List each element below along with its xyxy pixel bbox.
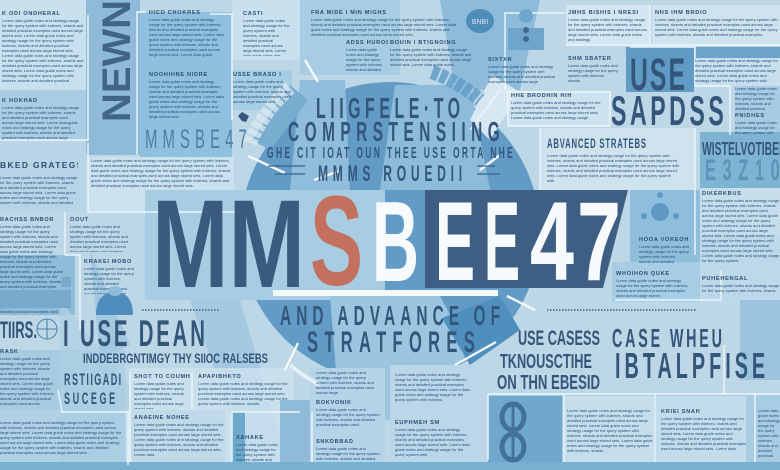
block: right paragraph two: Lorem data guide notes and strategy usage for the query system with indexes, shards and detailed practical. bbox=[735, 86, 777, 111]
subtitle stack: GHE CIT IOAT OUN THEE USE ORTA NHE bbox=[267, 144, 513, 162]
subheading: INDDEBRGNTIMGY THY SIIOC RALSEBS bbox=[83, 351, 268, 366]
block: whoihon: WHOIHON QUKE bbox=[616, 271, 670, 277]
block: oout: OOUT bbox=[70, 217, 89, 223]
faded repeat label: MMSBE47 bbox=[145, 123, 247, 154]
icon: pin bbox=[238, 112, 249, 122]
block: grated strategy bbox=[0, 160, 78, 207]
text blocks: top centre and right bbox=[311, 10, 779, 298]
block: top panel one: JMHS BISHIS I NRESI bbox=[568, 10, 639, 16]
heading rstiigadi success: SUCEGE bbox=[64, 389, 115, 408]
block: adss hurioso bbox=[346, 40, 388, 71]
text blocks: bottom row bbox=[0, 349, 780, 464]
block: noohihne nidre: NOOHIHNE NIDRE bbox=[149, 72, 208, 78]
block: secondary notes: K HOKHAD bbox=[2, 98, 38, 104]
block: column two: KRIEI SNAH bbox=[661, 409, 700, 415]
badge bbox=[466, 9, 494, 33]
block: hhe brodhin: Lorem data guide notes and strategy usage for the query system with indexes, shards and detailed practical examples used across large stored sets. Lorem data guide notes and strategy usage. bbox=[511, 100, 601, 120]
subtitle stack bbox=[267, 92, 513, 186]
block: sixtxr: SIXTXR bbox=[488, 57, 512, 63]
block: centre paragraph: Lorem data guide notes and strategy usage for the query system with indexes, shards and detailed practical examples used across large. bbox=[316, 370, 374, 395]
block: top panel two: Lorem data guide notes and strategy usage for the query system with indexes, shards and detailed practical examples used across large stored sets. Lorem data guide notes and strategy usage for the query system with indexes, shards and detailed practical examples. bbox=[655, 17, 778, 37]
main title MMSBEE47: S bbox=[310, 170, 363, 313]
headline USE SAPDSS: SAPDSS bbox=[611, 88, 724, 135]
main title MMSBEE47: 7 bbox=[577, 179, 621, 304]
block: usse braso: USSE BRASO I bbox=[233, 72, 282, 78]
heading rstiigadi success bbox=[64, 370, 121, 408]
icon: user bbox=[96, 286, 133, 315]
block: euphmeh: EUPHMEH SM bbox=[395, 420, 440, 426]
block: shm sbater: Lorem data guide notes and strategy usage for the query system with indexes, shards. bbox=[568, 63, 618, 83]
main title MMSBEE47: E bbox=[435, 179, 475, 304]
tagline: AND ADVAANCE OF bbox=[280, 300, 500, 331]
block: anaeine nohee: Lorem data guide notes and strategy usage for the query system with indexes, shards and detailed practical examples used across large stored sets. Lorem data guide notes and strategy usage for the query system with indexes, shards and detailed practical examples used across large stored sets. Lorem data. bbox=[134, 422, 224, 457]
block: pnidhes bbox=[735, 113, 777, 134]
block: loss paragraph: Lorem data guide notes and strategy usage for the query system with indexes, shards and detailed practical examples used across large stored sets. Lorem data guide notes and strategy usage for the query system with indexes. bbox=[395, 372, 470, 402]
block: iiico chokres: Lorem data guide notes and strategy usage for the query system with indexes, shards and detailed practical examples used across large stored sets. Lorem data guide notes and strategy usage for the query system with indexes, shards and detailed practical examples used across large stored sets. Lorem data guide. bbox=[149, 17, 224, 57]
headline USE SAPDSS: USE bbox=[630, 49, 685, 100]
subtitle stack: LIIGFELE·TO bbox=[316, 92, 460, 124]
block: hooa vokeohn: Lorem data guide notes and strategy usage for the query system with indexes, shards and detailed. bbox=[639, 244, 689, 264]
block: fra mide: FRA MIDE I MIN MIGHS bbox=[311, 10, 387, 16]
icon: globe bbox=[37, 319, 57, 339]
block: apapibhkto: Lorem data guide notes and strategy usage for the query system with indexes, shards and detailed practical examples used across large stored sets. Lorem data guide notes and strategy usage for the query system with indexes, shards. bbox=[198, 381, 288, 406]
icon: gear cluster bbox=[641, 192, 679, 230]
block: snkdbbad: Lorem data guide notes and strategy usage for the query system with indexes, shards and detailed. bbox=[316, 446, 380, 461]
headline I USE DEAN: I USE DEAN bbox=[63, 314, 205, 355]
use cases headings: ON THN EBESID bbox=[497, 372, 600, 394]
block: intro notes: K ODI ONDHERAL bbox=[2, 11, 61, 17]
main title MMSBEE47 bbox=[152, 170, 628, 314]
use cases headings: USE CASESS bbox=[518, 327, 600, 350]
block: top panel two: NHS IHM BRDIO bbox=[655, 10, 707, 16]
block: dikerkbus: Lorem data guide notes and strategy usage for the query system with indexes, shards and detailed practical examples used across large stored sets. Lorem data guide notes and strategy usage for the query system with indexes, shards and detailed practical examples used across large stored sets. Lorem data guide notes and strategy usage for the query system with indexes, shards and detailed practical examples used across large stored sets. Lorem data guide notes and strategy usage for the query system. bbox=[702, 198, 779, 263]
block: advanced strategies: Lorem data guide notes and strategy usage for the query system with indexes, shards and detailed practical examples used across large stored sets. Lorem data guide notes and strategy usage for the query system with indexes, shards and detailed practical examples used across large stored sets. Lorem data guide notes and strategy usage for the query system with. bbox=[547, 153, 679, 183]
subtitle stack: MMMS ROUEDII bbox=[318, 161, 462, 186]
block: whoihon: Lorem data guide notes and strategy usage for the query system with indexes, shards and detailed practical examples used across large stored. bbox=[616, 278, 688, 298]
tagline: STRATFORES bbox=[307, 326, 475, 359]
tagline bbox=[280, 300, 500, 359]
block: rask: RASK bbox=[0, 349, 19, 355]
block: lower left paragraph: Lorem data guide notes and strategy usage for the query system with indexes, shards and detailed practical examples used across large stored sets. Lorem data guide notes and strategy usage for the query system with indexes, shards and detailed practical examples used across large stored sets. Lorem data guide notes and strategy usage for the query system with indexes, shards and detailed practical examples used across large stored sets. bbox=[0, 420, 121, 455]
block: rask: Lorem data guide notes and strategy usage for the query system with indexes, shards and detailed practical examples used across large stored sets. Lorem data guide notes and strategy usage for the query system with indexes, shards and detailed practical examples used across. bbox=[0, 356, 55, 406]
block: hhe brodhin: HHE BRODHIN HIH bbox=[511, 93, 572, 99]
block: dikerkbus: DIKERKBUS bbox=[702, 191, 742, 197]
block: sixtxr: Lorem data guide notes and strategy usage for the query system with indexes, shards and detailed practical examples used across large. bbox=[488, 64, 555, 84]
main title MMSBEE47: MM bbox=[152, 175, 305, 314]
block: wide paragraph: Lorem data guide notes and strategy usage for the query system with indexes, shards and detailed practical examples used across large stored sets. Lorem data guide notes and strategy usage for the query system with indexes, shards and detailed practical examples used across large stored sets. Lorem data guide notes and strategy usage for the query system with indexes, shards and detailed practical examples used across large stored sets. bbox=[91, 158, 230, 188]
faded sidebar number: E3Z10 bbox=[705, 154, 780, 187]
block: shm sbater: SHM SBATER bbox=[568, 56, 612, 62]
use cases headings bbox=[497, 325, 765, 394]
block: bouin strategies: BOUIN I BTIGNOING bbox=[390, 40, 456, 46]
main title MMSBEE47: B bbox=[372, 179, 419, 306]
icon: bracket symbols bbox=[502, 402, 524, 462]
heading rstiigadi success: RSTIIGADI bbox=[64, 370, 121, 389]
block: bokvonik: BOKVONIK bbox=[316, 400, 352, 406]
block: column three: Lorem data guide notes and strategy usage for the query system with indexes, shards and detailed practical. bbox=[758, 408, 780, 458]
badge: BNBI bbox=[472, 19, 488, 26]
block: column one: Lorem data guide notes and strategy usage for the query system with indexes, shards and detailed practical examples used across large stored sets. Lorem data guide notes and strategy usage for the query system with indexes, shards and detailed practical examples used across large stored sets. Lorem data guide notes and strategy usage for the query system with indexes, shards. bbox=[567, 408, 653, 453]
block: xahake: XAHAKE bbox=[236, 435, 264, 441]
block: anaeine nohee: ANAEINE NOHEE bbox=[134, 415, 190, 421]
block: puhehengal: PUHEHENGAL bbox=[702, 276, 748, 282]
block: shot to coumh: SHOT TO COUMH bbox=[134, 374, 190, 380]
block: pnidhes: PNIDHES bbox=[735, 113, 765, 119]
headline USE SAPDSS bbox=[611, 49, 724, 135]
block: noohihne nidre: Lorem data guide notes and strategy usage for the query system with indexes, shards and detailed practical examples used across large stored sets. Lorem data guide notes and strategy usage for the query system with indexes, shards and detailed practical examples used across large stored sets. bbox=[149, 79, 224, 119]
use cases headings: IBTALPFISE bbox=[615, 347, 765, 387]
headline fragment TIIRS: TIIRS. bbox=[0, 317, 37, 344]
icon: server stack person bbox=[508, 9, 544, 50]
block: rachss bnbor: RACHSS BNBOR bbox=[0, 217, 54, 223]
block: casti: CASTI bbox=[243, 11, 263, 17]
block: snkdbbad bbox=[316, 439, 380, 461]
block: usse braso: Lorem data guide notes and strategy usage for the query system with indexes, shards and detailed practical examples used across large stored sets. bbox=[233, 79, 291, 104]
block: euphmeh: Lorem data guide notes and strategy usage for the query system with indexes, shards and detailed practical examples used across large stored sets. Lorem data guide notes and strategy usage for the query system with. bbox=[395, 427, 470, 457]
use cases headings: CASE WHEU bbox=[612, 325, 722, 353]
block: top panel one: Lorem data guide notes and strategy usage for the query system with indexes, shards and detailed practical examples used across large stored sets. Lorem data guide notes and strategy. bbox=[568, 17, 647, 42]
heading advanced strategies: ABVANCED STRATEBS bbox=[547, 137, 646, 152]
block: puhehengal bbox=[702, 276, 779, 295]
icon: server panel bbox=[0, 277, 71, 308]
block: column two: Lorem data guide notes and strategy usage for the query system with indexes, shards and detailed practical examples used across large stored sets. Lorem data guide notes and strategy usage for the query system with indexes, shards and detailed practical examples used across large stored sets. Lorem data. bbox=[661, 416, 746, 451]
subtitle stack: COMPRSTENSIING bbox=[288, 116, 500, 147]
vertical word NEWN: NEWN bbox=[95, 0, 139, 122]
block: bouin strategies: Lorem data guide notes and strategy usage for the query system with indexes, shards and detailed practical examples used across large stored sets. Lorem data guide notes. bbox=[390, 47, 471, 67]
block: bokvonik: Lorem data guide notes and strategy usage for the query system with indexes, shards and detailed practical examples used. bbox=[316, 407, 380, 427]
main title MMSBEE47: 4 bbox=[530, 179, 574, 304]
text blocks: top left column bbox=[0, 10, 291, 316]
use cases headings: TKNOUSCTIHE bbox=[500, 351, 592, 373]
main title MMSBEE47: E bbox=[484, 179, 520, 304]
block: iiico chokres: IIICO CHOKRES bbox=[149, 10, 201, 16]
block: apapibhkto: APAPIBHKTO bbox=[198, 374, 241, 380]
block: snkdbbad: SNKDBBAD bbox=[316, 439, 354, 445]
